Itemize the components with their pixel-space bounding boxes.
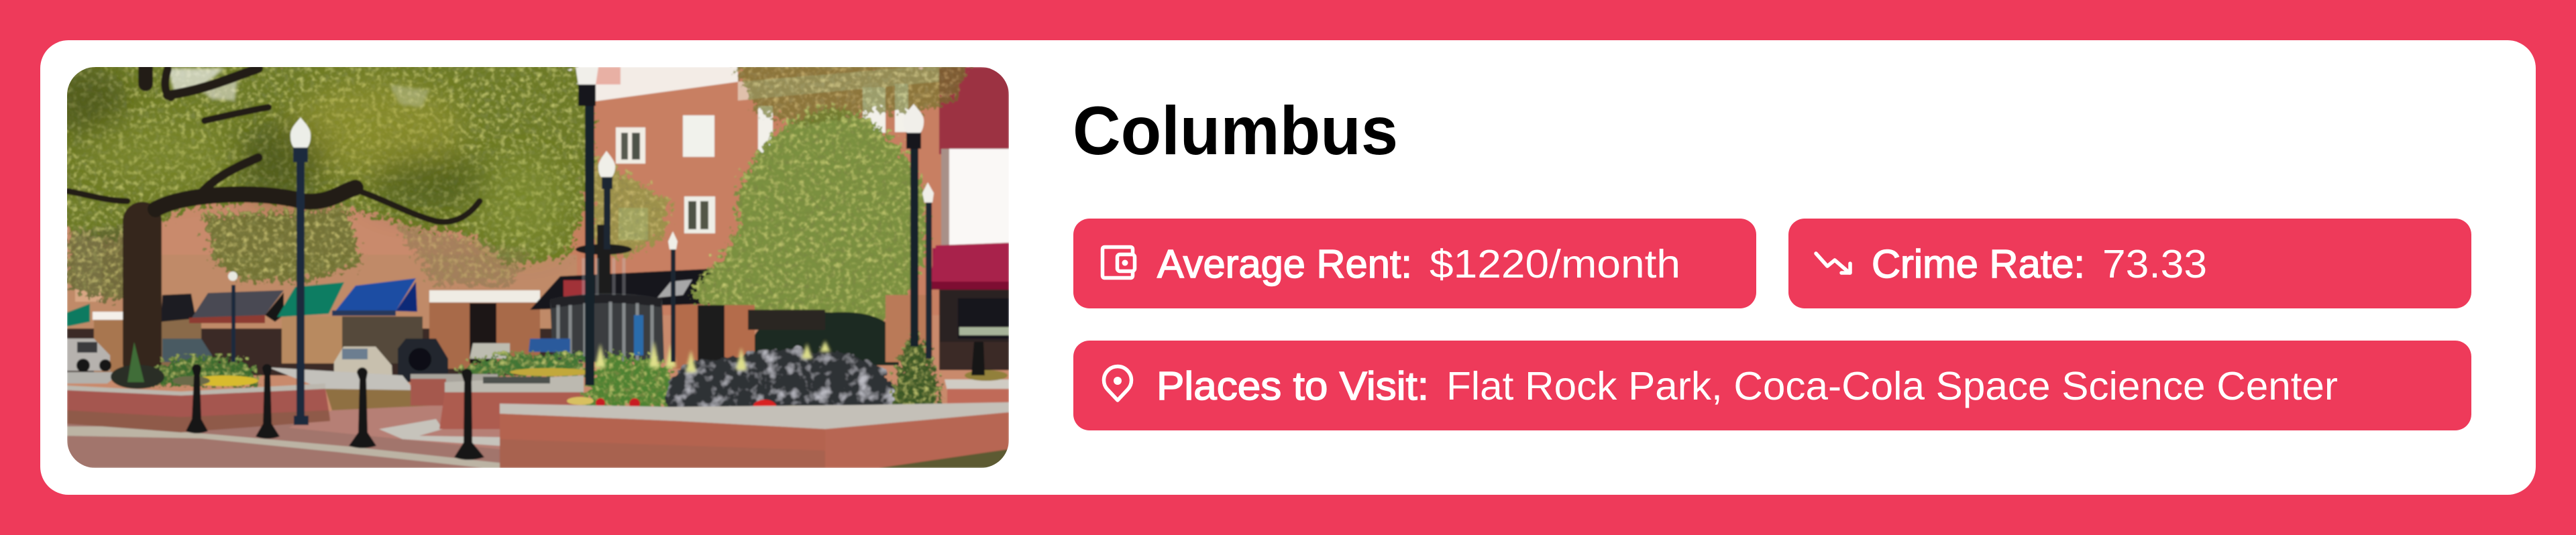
pill: average rent	[1073, 219, 1756, 308]
fountain	[550, 225, 664, 362]
right street tree	[688, 67, 974, 322]
value: crime rate: 73.33	[2102, 242, 2207, 286]
parked cars	[67, 339, 570, 382]
canopy light and shade	[47, 67, 570, 248]
value: places list: Flat Rock Park, Coca-Cola Space Science Center	[1446, 364, 2338, 408]
photo: Columbus town square with trees, shops, fountain and brick planters	[47, 60, 1009, 468]
street and paving	[67, 366, 500, 468]
label: average rent: Average Rent:	[1157, 242, 1412, 286]
value: rent per month: $1220/month	[1430, 242, 1680, 286]
right-hand red building and white sign	[929, 67, 1009, 370]
pill: crime rate	[1788, 219, 2471, 308]
storefront behind planter	[671, 295, 932, 369]
large oak canopy	[60, 60, 671, 302]
label: places to visit: Places to Visit:	[1157, 364, 1429, 408]
icon: trending down arrow	[1816, 253, 1850, 273]
oak trunk and branches	[67, 67, 480, 362]
city title: Columbus	[1073, 93, 1398, 169]
iron bollards	[186, 342, 985, 460]
street lamps	[228, 67, 934, 425]
middle and back planters	[411, 352, 1009, 429]
icon: map pin	[1104, 367, 1132, 400]
pill: places to visit	[1073, 341, 2471, 430]
dark hedge	[751, 312, 899, 365]
distant shop fronts	[67, 255, 577, 377]
icon: wallet	[1103, 247, 1135, 278]
label: crime rate: Crime Rate:	[1872, 242, 2085, 286]
foreground flower bed	[566, 330, 945, 408]
awnings	[67, 268, 735, 326]
foreground planter wall	[500, 402, 1009, 468]
left planter with flowers	[67, 342, 330, 432]
sky gaps through canopy	[168, 68, 429, 107]
upper building facade	[567, 67, 941, 315]
